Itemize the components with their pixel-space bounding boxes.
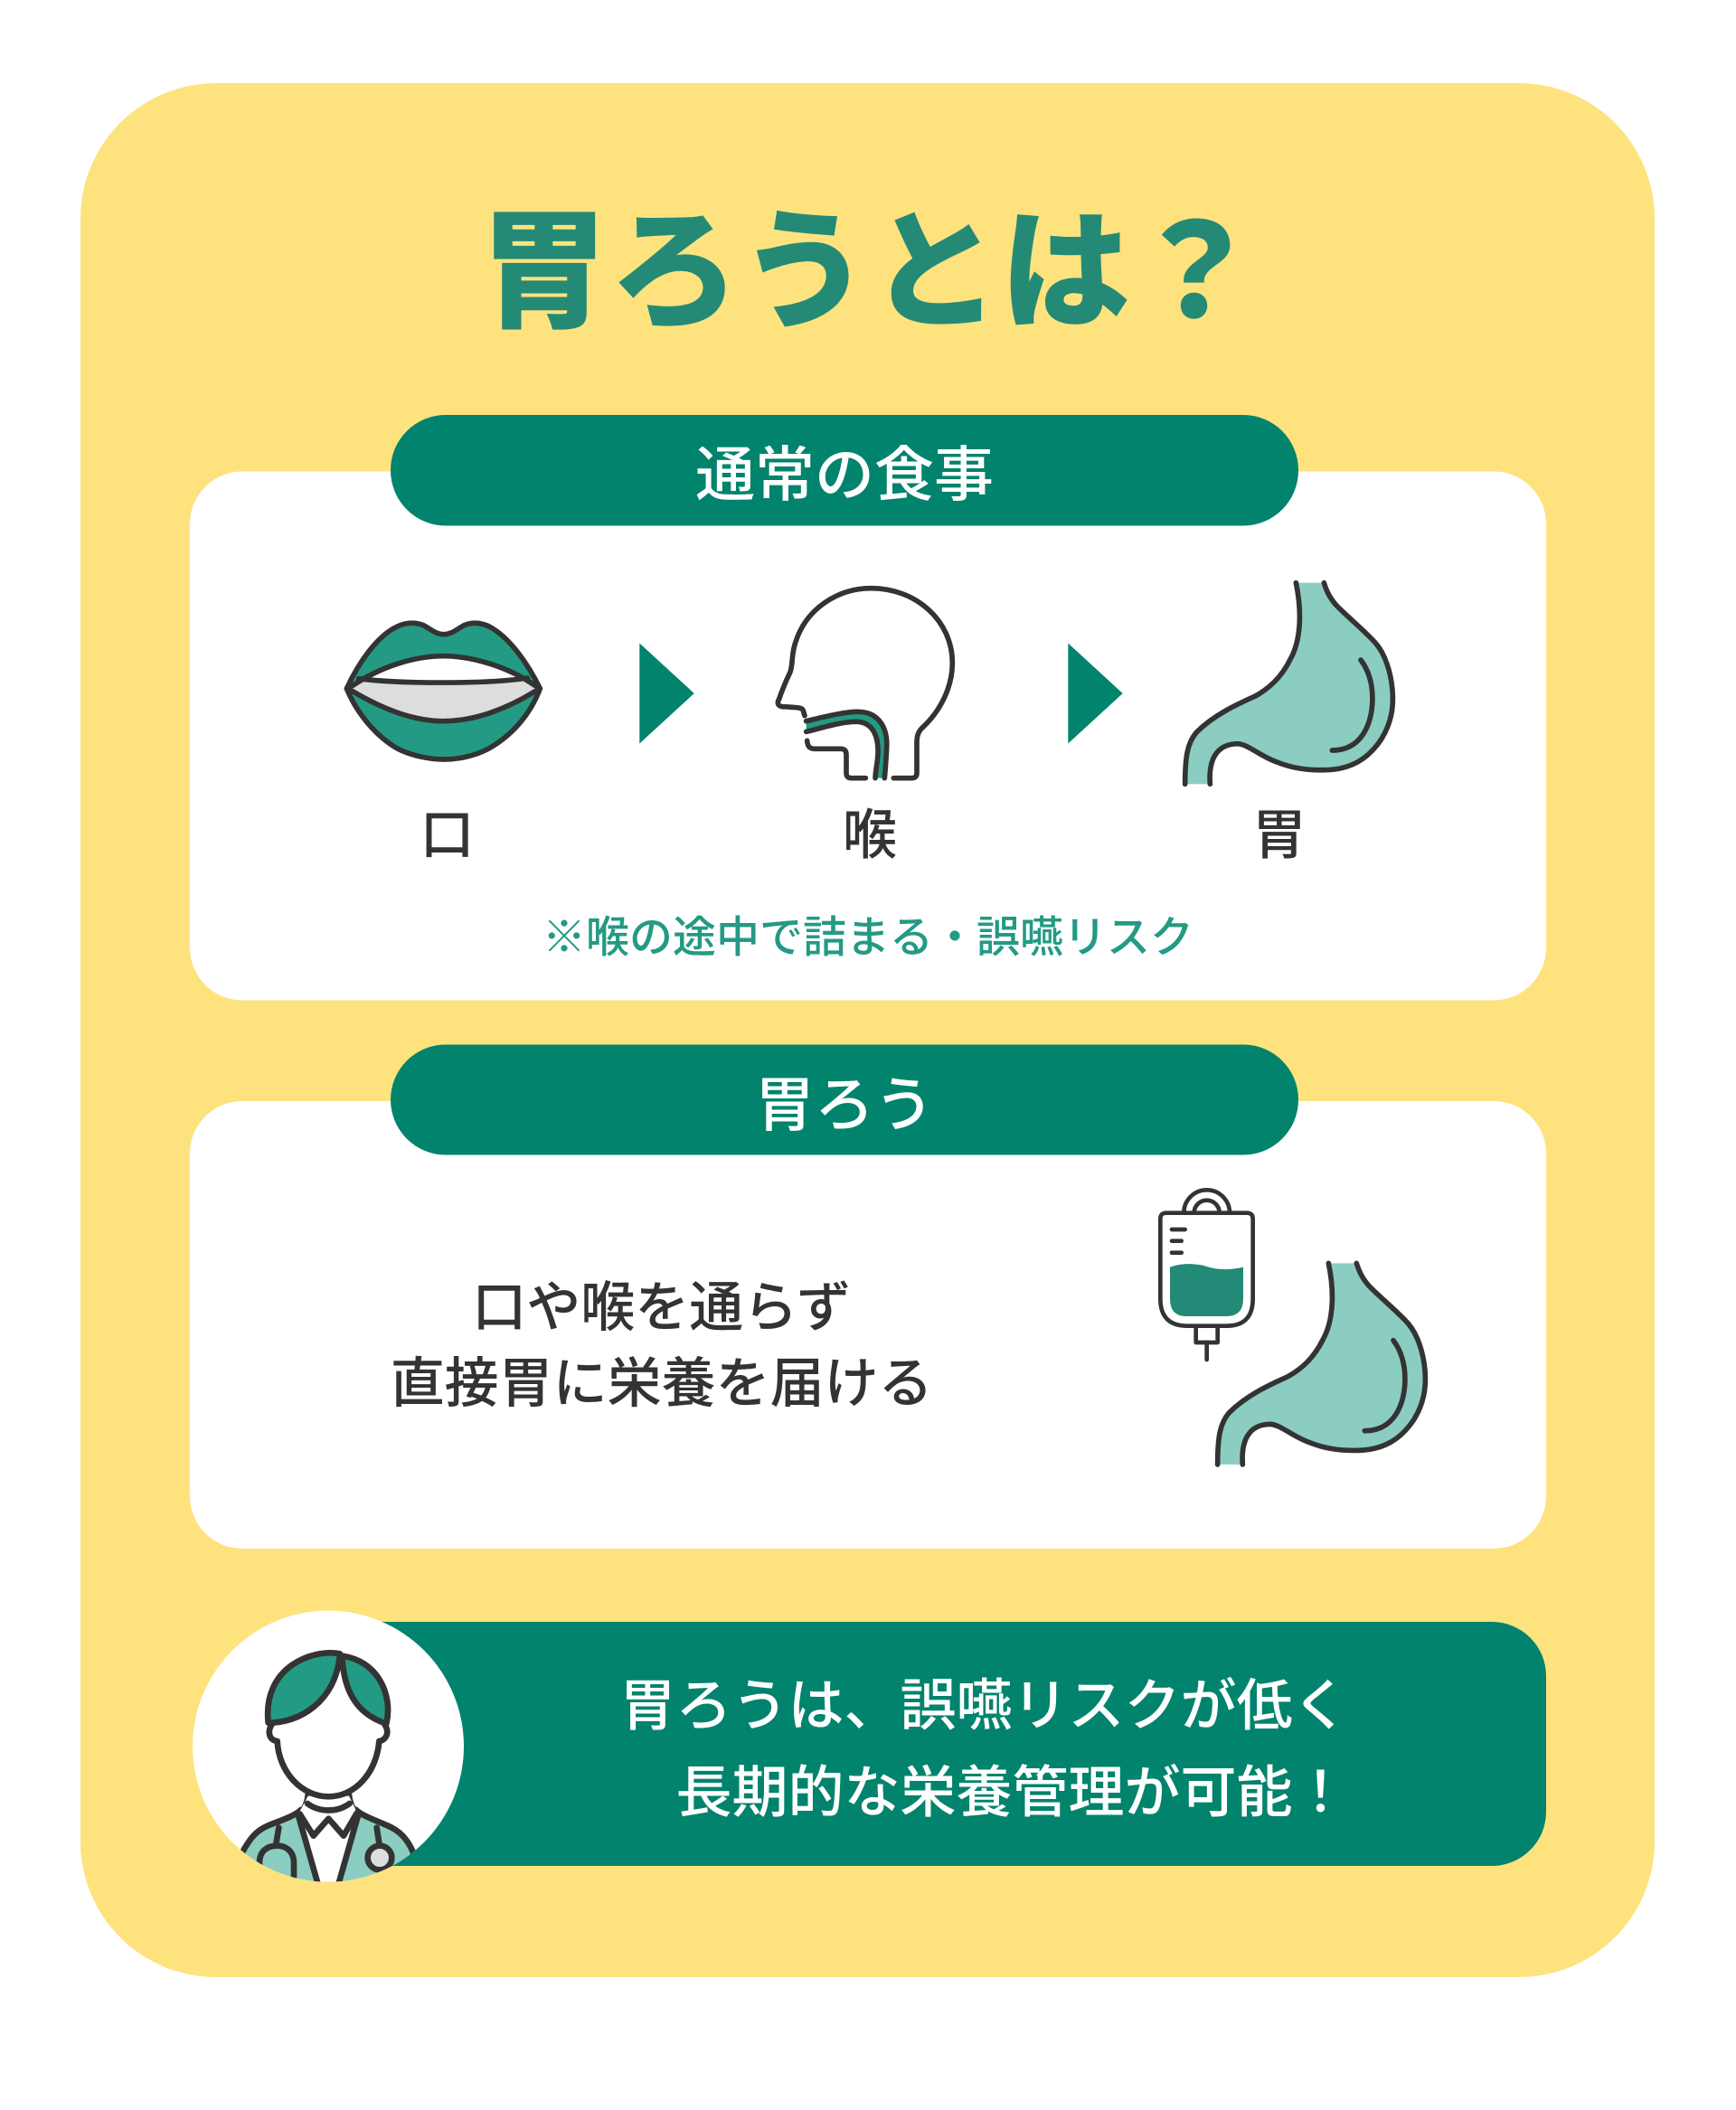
- summary banner: 長期的な栄養管理が可能！: [676, 1762, 1349, 1824]
- heading pill: gastrostomy: [391, 1045, 1298, 1155]
- label: mouth: 口: [420, 805, 474, 866]
- heading pill: normal meal: [391, 415, 1298, 526]
- label: stomach: 胃: [1252, 805, 1307, 866]
- icon: head and throat: [778, 589, 952, 778]
- panel: normal meal: [190, 415, 1546, 1000]
- heading pill: gastrostomy: 胃ろう: [755, 1071, 934, 1138]
- risk note: ※喉の途中で詰まる・誤嚥リスク: [542, 914, 1194, 962]
- summary banner: 胃ろうは、誤嚥リスクが低く: [620, 1675, 1349, 1738]
- panel: gastrostomy: [190, 1045, 1546, 1549]
- icon: lips: [346, 623, 540, 759]
- description text: [391, 1277, 933, 1414]
- arrow 2: [1068, 644, 1123, 743]
- arrow 1: [639, 644, 694, 743]
- heading pill: normal meal: 通常の食事: [695, 441, 994, 508]
- label: throat: 喉: [843, 805, 897, 866]
- icon: stomach: [1218, 1263, 1425, 1465]
- description text: 直接胃に栄養を届ける: [391, 1353, 933, 1414]
- icon: stomach: [1185, 583, 1392, 784]
- description text: 口や喉を通らず: [472, 1277, 851, 1338]
- title: 胃ろうとは？: [479, 200, 1260, 345]
- icon: IV bag: [1160, 1190, 1253, 1360]
- icon: doctor: [193, 1611, 464, 1892]
- summary banner: [326, 1622, 1546, 1866]
